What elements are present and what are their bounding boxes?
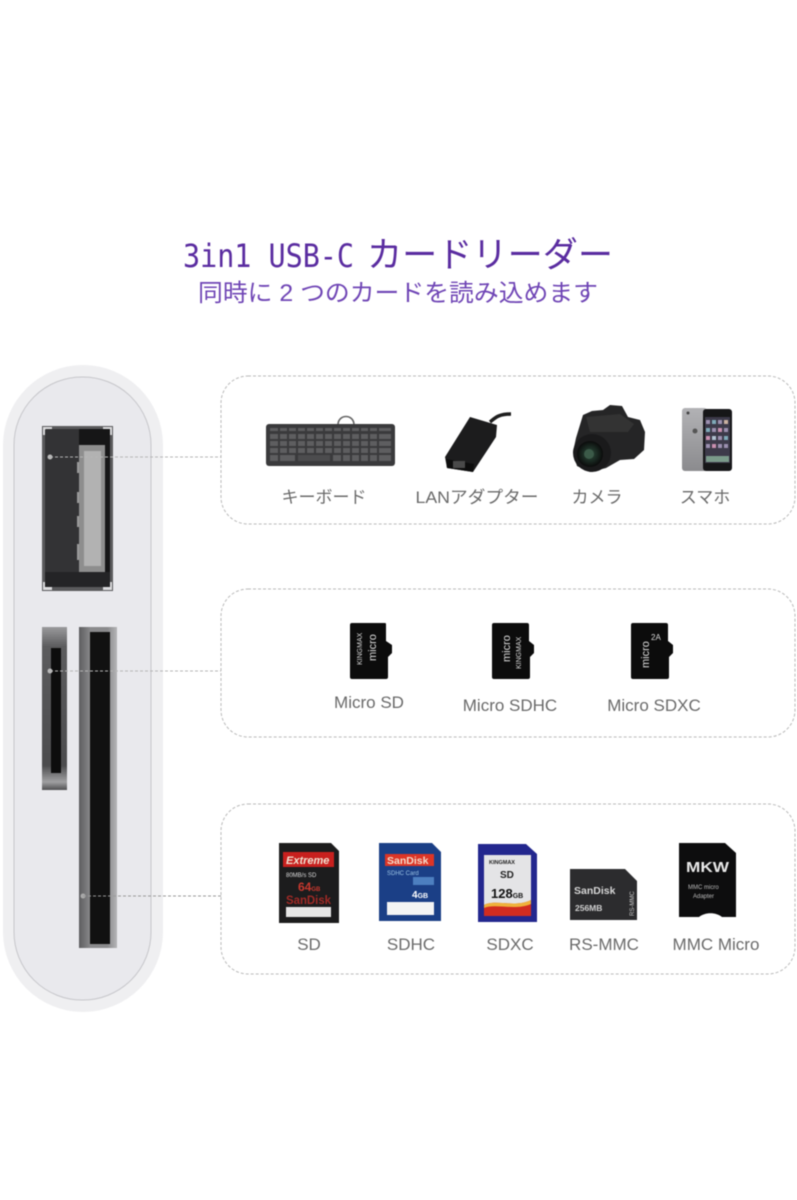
icon: RS-MMC card: SanDisk	[574, 885, 616, 897]
icon: SDXC card: 128GB	[491, 886, 523, 901]
icon: SD card: 64GB	[298, 880, 321, 894]
label: LAN adapter: LANアダプター	[416, 488, 538, 507]
subtitle: 同時に 2 つのカードを読み込めます	[198, 280, 598, 307]
icon: SDHC card: 4GB	[412, 890, 428, 901]
label: SDXC: SDXC	[486, 935, 534, 954]
icon: Micro SDXC card: 2A	[651, 633, 661, 642]
icon: Micro SDHC card: micro	[501, 635, 513, 662]
icon: MMC Micro adapter: MMC micro	[688, 885, 719, 891]
icon: Micro SD card	[350, 623, 392, 679]
panel: micro SD cards	[221, 589, 795, 737]
connector line: micro SD	[48, 668, 221, 674]
connector line: USB	[48, 454, 221, 460]
icon: Micro SDHC card: KINGMAX	[516, 636, 523, 669]
micro SD slot	[42, 627, 67, 790]
SD slot	[79, 627, 117, 948]
panel: SD cards	[221, 804, 795, 974]
label: Micro SDXC: Micro SDXC	[607, 696, 701, 715]
title: カードリーダー	[367, 236, 613, 275]
label: smartphone: スマホ	[680, 488, 730, 507]
label: Micro SDHC: Micro SDHC	[463, 696, 557, 715]
icon: SD card	[279, 843, 339, 923]
icon: SDXC card: KINGMAX	[489, 860, 515, 866]
icon: SD card: Extreme	[286, 855, 329, 867]
icon: SDHC card: SDHC Card	[387, 871, 419, 877]
label: camera: カメラ	[572, 488, 622, 507]
icon: camera	[573, 405, 645, 472]
icon: MMC Micro adapter	[679, 843, 736, 917]
label: Micro SD: Micro SD	[334, 693, 404, 712]
panel: USB devices	[221, 376, 795, 524]
label: RS-MMC: RS-MMC	[569, 935, 639, 954]
USB port	[42, 426, 113, 591]
icon: SDHC card: SanDisk	[387, 855, 429, 867]
icon: RS-MMC card	[570, 869, 637, 920]
icon: Micro SDXC card: micro	[640, 641, 652, 668]
title	[183, 236, 613, 275]
icon: keyboard	[266, 416, 395, 466]
icon: SD card: SanDisk	[286, 893, 331, 907]
icon: MMC Micro adapter: Adapter	[693, 894, 714, 900]
title: 3in1 USB-C	[183, 237, 354, 275]
icon: Micro SD card: KINGMAX	[357, 632, 364, 665]
label: SD: SD	[297, 935, 321, 954]
label: SDHC: SDHC	[387, 935, 435, 954]
icon: MMC Micro adapter: MKW	[686, 859, 730, 876]
label: keyboard: キーボード	[282, 488, 366, 507]
icon: RS-MMC card: RS-MMC	[630, 891, 636, 916]
icon: LAN adapter	[445, 414, 511, 472]
connector line: SD	[80, 894, 221, 898]
icon: SDXC card: SD	[500, 870, 514, 881]
icon: SD card: 80MB/s SD	[286, 873, 317, 879]
icon: SDXC card	[478, 844, 537, 922]
label: MMC Micro: MMC Micro	[673, 935, 759, 954]
icon: Micro SDHC card	[492, 623, 534, 679]
icon: smartphone	[682, 408, 732, 471]
icon: Micro SD card: micro	[367, 634, 379, 661]
icon: SDHC card	[379, 843, 441, 921]
icon: Micro SDXC card	[631, 623, 673, 679]
icon: RS-MMC card: 256MB	[575, 903, 602, 913]
device: card reader body	[3, 365, 163, 1012]
